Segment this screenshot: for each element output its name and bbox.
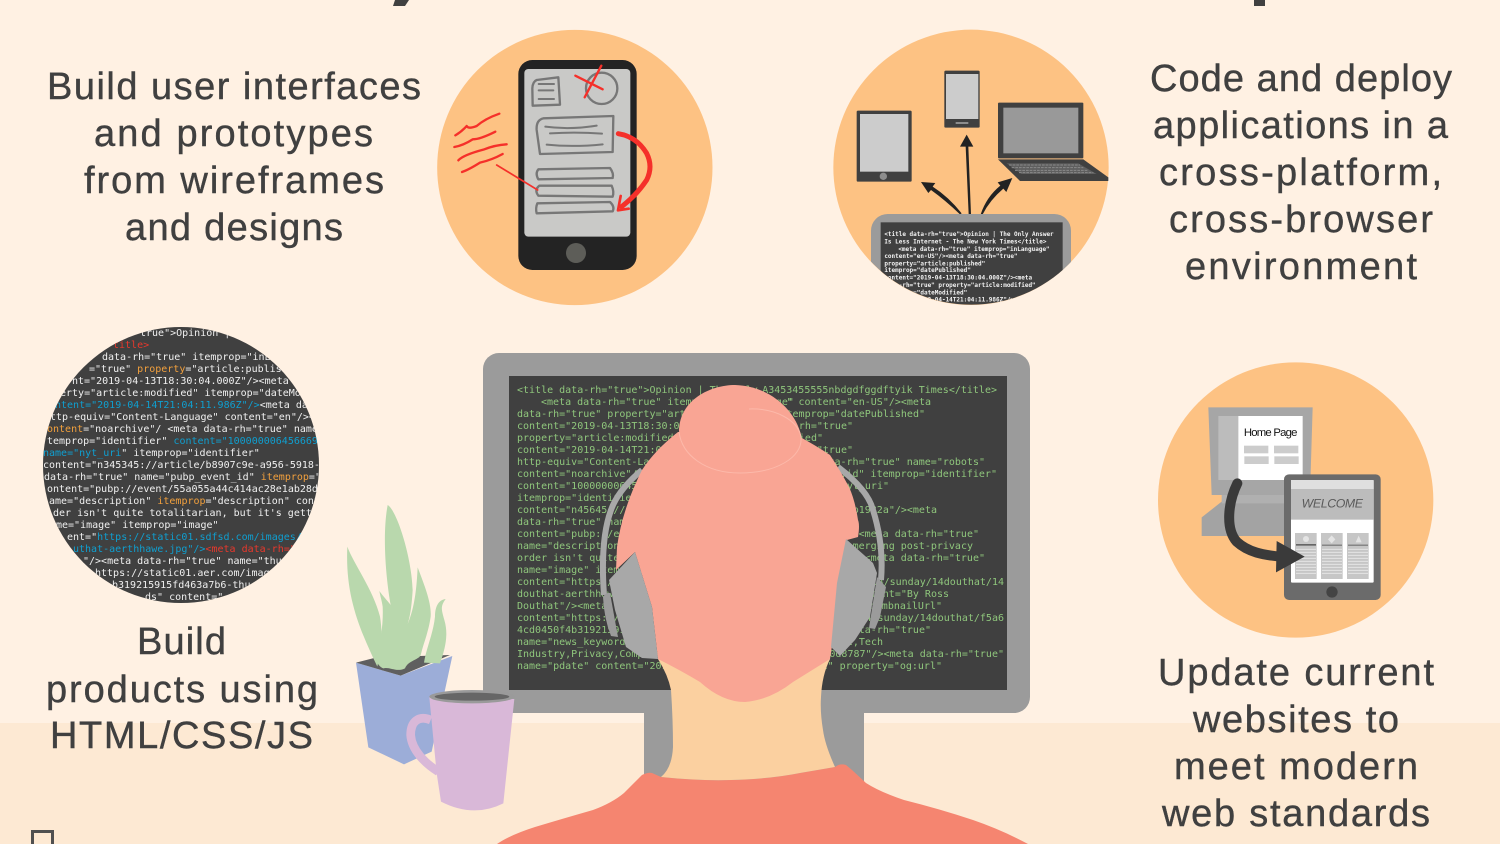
text: build products: HTML/CSS/JS: [50, 715, 313, 757]
code on monitor screen: itemprop="datePublished": [780, 409, 925, 420]
arrows to devices: [921, 135, 1012, 214]
code on monitor screen: content="https://static01: [517, 613, 668, 624]
left ear cup side: [603, 593, 618, 637]
modern tablet: WELCOME: [1302, 497, 1364, 511]
code on monitor screen: data-rh="true" property="article:published": [517, 409, 776, 420]
text: update current websites: meet modern: [1174, 746, 1418, 788]
icon: website update: [1158, 362, 1433, 638]
headphone band: [603, 467, 882, 595]
code on monitor screen: content="2019-04-14T21:04:11.986Z"/>: [517, 445, 734, 456]
right ear cup: [831, 539, 877, 656]
icon: cross-platform devices: [833, 30, 1109, 336]
code on monitor screen: itemprop="identifier": [517, 493, 643, 504]
icon: code circle: nt="2019-04-13T18:30:04.000Z"/><meta: [72, 376, 289, 387]
code on monitor screen: Industry,Privacy,Computers: [517, 649, 674, 660]
code on monitor screen: <meta data-rh="true" itemprop="inLanguage": [541, 397, 794, 408]
code on monitor screen: <title data-rh="true">Opinion | The Only: [517, 385, 758, 396]
icon: code circle: ent="https://static01.sdfsd.com/images/: [67, 532, 302, 543]
code on monitor screen: "/><meta data-rh="true": [847, 553, 985, 564]
neck: [658, 659, 835, 780]
icon: code circle: ame="description" itemprop="description" cont: [49, 496, 320, 507]
code on monitor screen: content="n45645://article: [517, 505, 668, 516]
icon: code circle: content="n345345://article/b8907c9e-a956-5918-a: [43, 460, 326, 471]
text: update current websites: [1158, 652, 1434, 835]
text: update current websites: web standards: [1161, 793, 1430, 835]
code monitor: itemprop="datePublished": [884, 267, 971, 274]
icon: code circle: name="nyt_uri" itemprop="identifier": [43, 448, 260, 459]
code on monitor screen: A3453455555nbdgdfggdftyik Times</title>: [762, 385, 997, 396]
text: code and deploy: environment: [1185, 246, 1417, 288]
shirt: [497, 764, 1028, 844]
text: build user interfaces: and designs: [125, 207, 343, 249]
curved arrow: [1229, 483, 1305, 572]
text: build products: products using: [46, 669, 318, 711]
code on monitor screen: [517, 385, 1004, 672]
code on monitor screen: data-rh="true" name="pubp: [517, 517, 668, 528]
code on monitor screen: order isn't quite: [517, 553, 619, 564]
code on monitor screen: " content="en-US"/><meta: [786, 397, 931, 408]
coffee mug: [411, 690, 515, 810]
code on monitor screen: name="nyt_uri": [805, 481, 889, 492]
icon: code circle: erty="article:modified" itemprop="dateModified": [60, 388, 343, 399]
text: build user interfaces: [47, 66, 421, 249]
code on monitor screen: property="article:modified": [517, 433, 680, 444]
code on monitor screen: data-rh="true": [769, 445, 853, 456]
code on monitor screen: name="pdate" content="20190414": [517, 661, 704, 672]
icon: code circle: [43, 327, 343, 603]
text: build user interfaces: from wireframes: [84, 160, 384, 202]
text: build user interfaces: Build user interfaces: [47, 66, 421, 108]
icon: code circle: ="true" property="article:published": [89, 364, 306, 375]
text: update current websites: websites to: [1192, 699, 1399, 741]
icon: code circle: ontent="pubp://event/55a055a44c414ac28e1ab28d: [47, 484, 318, 495]
desk surface: [0, 723, 1500, 844]
code monitor: content="2019-04-13T18:30:04.000Z"/><meta: [884, 274, 1032, 281]
code on monitor screen: Douthat"/><meta: [517, 601, 607, 612]
cropped title descenders: [393, 0, 1265, 6]
code on monitor screen: http-equiv="Content-Language": [517, 457, 692, 468]
code monitor: <meta data-rh="true" itemprop="inLanguage": [898, 246, 1050, 253]
text: build user interfaces: and prototypes: [94, 113, 373, 155]
icon: code circle: data-rh="true" itemprop="inLanguage": [102, 352, 319, 363]
code on monitor screen: data-rh="true": [847, 625, 931, 636]
code monitor: content="2019-04-14T21:04:11.986Z"/><meta: [884, 296, 1032, 303]
code on monitor screen: content="pubp://event: [517, 529, 643, 540]
code monitor: itemprop="dateModified": [884, 289, 967, 296]
text: code and deploy: Code and deploy: [1150, 58, 1452, 100]
code on monitor screen: b8907c9e-a956-5918-ab1d-p1982a"/><meta: [708, 505, 937, 516]
code on monitor screen: e" property="og:url": [822, 661, 942, 672]
code on monitor screen: content="2019-04-13T18:30:04.000Z"/>: [517, 421, 734, 432]
person from behind: [497, 385, 1028, 844]
code on monitor screen: an emerging post-privacy: [828, 541, 973, 552]
icon: code circle: ntent="2019-04-14T21:04:11.986Z"/><meta data-rh: [55, 400, 338, 411]
code monitor: [871, 214, 1071, 305]
left ear cup: [609, 552, 658, 659]
code on monitor screen: content="noarchive"/><meta: [517, 469, 674, 480]
code on monitor screen: <meta data-rh="true" name="robots": [780, 457, 985, 468]
plant in blue pot: [347, 505, 452, 764]
icon: code circle: ontent="noarchive"/ <meta data-rh="true" name: [47, 424, 318, 435]
code on monitor screen: 0d8787"/><meta data-rh="true": [829, 649, 1004, 660]
code on monitor screen: name="image" itemprop: [517, 565, 643, 576]
icon: code circle: der isn't quite totalitarian, but it's gett: [53, 508, 312, 519]
text: build products: Build: [137, 621, 226, 663]
code on monitor screen: name="description" itemprop: [517, 541, 680, 552]
hair and bun: [616, 385, 859, 702]
code on monitor screen: itemprop="dateModified": [685, 433, 823, 444]
code on monitor screen: douthat-aerthhawe.jpg: [517, 589, 643, 600]
icon: code circle: title>: [113, 340, 149, 351]
modern tablet: [1284, 474, 1381, 600]
code on monitor screen: name="news_keywords": [517, 637, 637, 648]
text: build products: [46, 621, 318, 757]
old desktop computer: [1202, 407, 1313, 536]
icon: code circle: me="image" itemprop="image": [56, 520, 219, 531]
icon: code circle: data-rh="true" name="pubp_event_id" itemprop=": [44, 472, 321, 483]
text: code and deploy: [1150, 58, 1452, 288]
code on monitor screen: content="https://static01: [517, 577, 668, 588]
old desktop computer: Home Page: [1244, 427, 1297, 439]
text: code and deploy: cross-browser: [1169, 199, 1433, 241]
code on monitor screen: data-rh="true": [769, 421, 853, 432]
code on monitor screen: Internet,Tech: [805, 637, 883, 648]
code monitor: Is Less Internet - The New York Times</title>: [884, 238, 1047, 245]
code on monitor screen: content="100000006456669": [517, 481, 668, 492]
code monitor: content="en-US"/><meta data-rh="true": [884, 253, 1018, 260]
icon: code circle: b319215915fd463a7b6-thu: [112, 580, 250, 591]
code on monitor screen: name="thumbnailUrl": [828, 601, 942, 612]
device: phone: [944, 71, 980, 128]
code on monitor screen: /2019/04/14/sunday/14douthat/f5a6: [805, 613, 1004, 624]
icon: code circle: https://static01.aer.com/imag: [95, 568, 270, 579]
icon: code circle: temprop="identifier" content="100000006456669: [47, 436, 318, 447]
cropped footer glyph: [32, 832, 52, 844]
code on monitor screen: name="article:id" itemprop="identifier": [762, 469, 997, 480]
code on monitor screen: content="By Ross: [853, 589, 949, 600]
icon: code circle: "/><meta data-rh="true" name="thu: [83, 556, 282, 567]
code monitor: <title data-rh="true">Opinion | The Only Answer: [884, 231, 1054, 238]
device: laptop: [998, 103, 1108, 181]
device: tablet: [857, 111, 912, 182]
text: update current websites: Update current: [1158, 652, 1434, 694]
text: code and deploy: applications in a: [1153, 105, 1449, 147]
icon: wireframe on phone: [437, 30, 712, 305]
icon: code circle: uthat-aerthhawe.jpg"/><meta data-rh=": [73, 544, 296, 555]
code on monitor screen: 4cd0450f4b319215915: [517, 625, 631, 636]
right ear cup side: [869, 577, 886, 629]
code monitor: property="article:published": [884, 260, 985, 267]
bun highlight: [679, 409, 801, 473]
monitor: [483, 353, 1030, 810]
icon: code circle: true">Opinion |: [140, 328, 230, 339]
code on monitor screen: /2019/04/14/sunday/14douthat/14: [817, 577, 1004, 588]
icon: code circle: ttp-equiv="Content-Language" content="en"/><meta: [50, 412, 339, 423]
icon: code circle: ds" content=": [145, 592, 223, 603]
code on monitor screen: "/><meta data-rh="true": [841, 529, 979, 540]
text: code and deploy: cross-platform,: [1159, 152, 1442, 194]
code monitor: data-rh="true" property="article:modified": [884, 282, 1036, 289]
